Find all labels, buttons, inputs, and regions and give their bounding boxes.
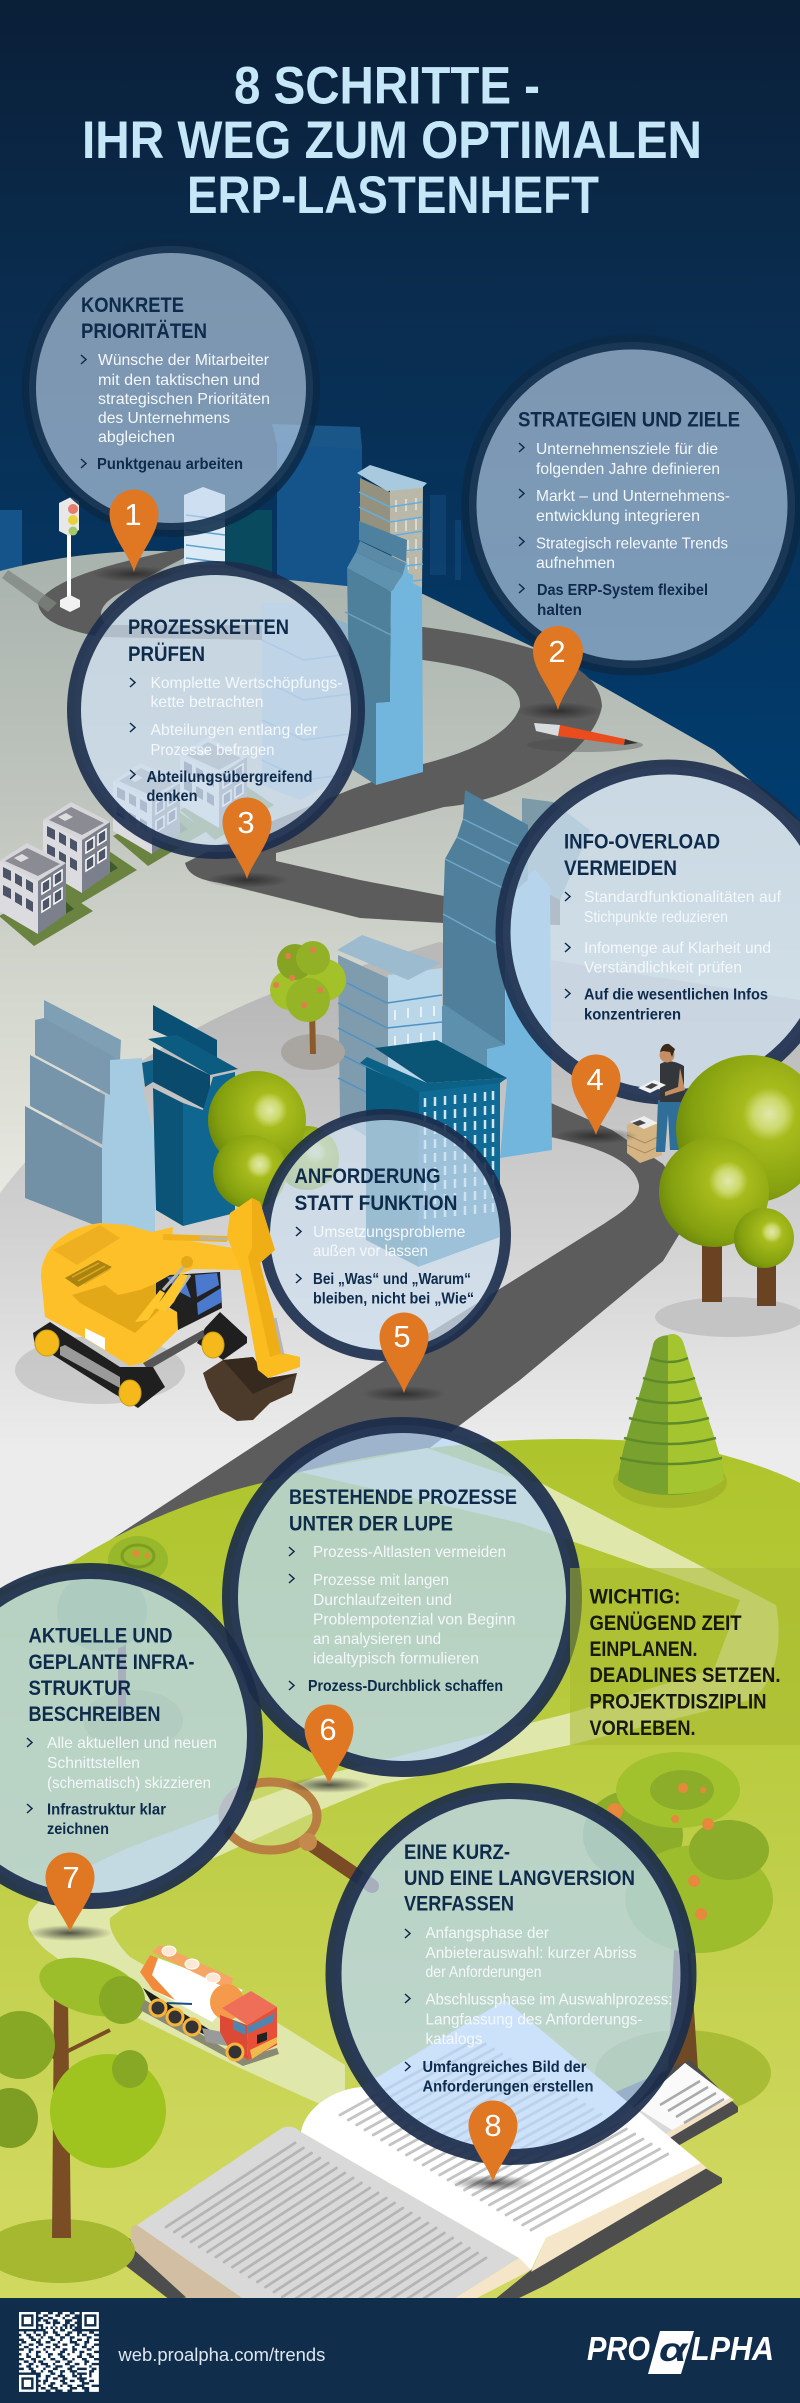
cover <box>108 2238 189 2300</box>
bullet list: Das ERP-System flexibel <box>537 582 708 599</box>
heading: EINE KURZ- <box>404 1840 510 1864</box>
panel: step 7 Infrastruktur beschreiben <box>0 1571 255 1901</box>
heading: UND EINE LANGVERSION <box>404 1866 635 1890</box>
icon: open book <box>108 2000 738 2342</box>
tree: spheres by excavator <box>208 1071 339 1209</box>
bullet list: folgenden Jahre definieren <box>536 461 720 478</box>
url: web.proalpha.com/trends <box>117 2345 325 2365</box>
bullet list <box>289 1544 516 1695</box>
building: central tower <box>345 465 427 785</box>
logo <box>587 2330 774 2374</box>
bullet list: Markt – und Unternehmens- <box>536 488 730 505</box>
bullet list: Infomenge auf Klarheit und <box>584 940 771 957</box>
bullet list: Anfangsphase der <box>426 1925 550 1942</box>
panel: step 6 Bestehende Prozesse <box>230 1425 574 1769</box>
callout: Wichtig: DEADLINES SETZEN. <box>590 1664 780 1687</box>
marker: pin 6 <box>287 1704 371 1793</box>
bullet list: des Unternehmens <box>98 410 230 427</box>
heading: AKTUELLE UND <box>28 1624 172 1648</box>
bullet list: kette betrachten <box>150 694 264 711</box>
bullet list <box>405 1925 672 2096</box>
bullet list: Wünsche der Mitarbeiter <box>98 352 270 369</box>
icon: excavator <box>15 1198 300 1421</box>
bullet list: Auf die wesentlichen Infos <box>584 986 768 1004</box>
heading: ANFORDERUNG <box>294 1164 440 1188</box>
cone tree <box>613 1334 727 1508</box>
bullet list: aufnehmen <box>536 555 615 572</box>
ground <box>0 551 800 2300</box>
right page <box>301 2000 701 2270</box>
bullet list <box>81 352 270 473</box>
small office buildings <box>0 737 274 946</box>
logo: PRO <box>587 2330 650 2367</box>
heading <box>28 1624 194 1726</box>
bullet list: entwicklung integrieren <box>536 508 700 525</box>
building: tower behind circle 3 <box>262 603 350 800</box>
bullet list: Langfassung des Anforderungs- <box>426 2011 642 2028</box>
bullet list <box>519 441 730 619</box>
icon: pen <box>527 723 643 752</box>
track left <box>33 1322 165 1408</box>
marker: pin 7 <box>28 1852 112 1941</box>
bullet list: Schnittstellen <box>47 1755 140 1772</box>
panel: step 1 konkrete Prioritäten <box>29 246 313 530</box>
marker: pin 5 <box>362 1312 446 1402</box>
bullet list: mit den taktischen und <box>98 372 260 389</box>
marker: pin 1: 1 <box>124 497 142 532</box>
marker: pin 3 <box>205 798 289 888</box>
title: IHR WEG ZUM OPTIMALEN <box>82 111 702 170</box>
bullet list: Strategisch relevante Trends <box>536 536 728 552</box>
bullet list <box>130 675 342 805</box>
body <box>41 1223 243 1366</box>
heading <box>564 830 720 880</box>
heading <box>404 1840 635 1916</box>
hydraulic arms <box>163 1263 190 1310</box>
bullet list: idealtypisch formulieren <box>313 1651 479 1668</box>
heading: VERFASSEN <box>404 1892 514 1916</box>
icon: tanker truck <box>140 1945 279 2066</box>
heading: PROZESSKETTEN <box>128 615 289 639</box>
heading: VERMEIDEN <box>564 856 677 880</box>
heading: PRÜFEN <box>128 641 205 666</box>
small tower <box>184 487 225 565</box>
marker: pin 8 <box>451 2100 535 2191</box>
heading: INFO-OVERLOAD <box>564 830 720 854</box>
bullet list: an analysieren und <box>313 1631 441 1648</box>
callout: Wichtig: GENÜGEND ZEIT <box>590 1612 742 1635</box>
callout: Wichtig: PROJEKTDISZIPLIN <box>590 1690 766 1713</box>
bullet list <box>296 1224 474 1308</box>
heading: STRUKTUR <box>28 1676 131 1700</box>
bullet list: Durchlaufzeiten und <box>313 1592 452 1609</box>
callout: Wichtig: WICHTIG: <box>590 1586 680 1608</box>
bullet list: Stichpunkte reduzieren <box>584 909 728 926</box>
heading: STRATEGIEN UND ZIELE <box>518 408 740 432</box>
marker: pin 6: 6 <box>319 1712 337 1747</box>
marker: pin 4 <box>554 1054 638 1144</box>
bullet list: Bei „Was“ und „Warum“ <box>313 1271 471 1288</box>
bullet list: Abschlussphase im Auswahlprozess: <box>426 1992 672 2009</box>
bullet list: Alle aktuellen und neuen <box>47 1735 217 1752</box>
bullet list: Umfangreiches Bild der <box>422 2059 586 2076</box>
title: ERP-LASTENHEFT <box>187 166 599 225</box>
bullet list: Anbieterauswahl: kurzer Abriss <box>426 1945 636 1962</box>
bullet list: der Anforderungen <box>426 1964 542 1981</box>
pale path on hill <box>28 1448 779 2120</box>
city block ground <box>0 942 800 2300</box>
cabin <box>156 1272 222 1330</box>
marker: pin 5: 5 <box>393 1319 411 1354</box>
big tree right <box>583 1752 773 2116</box>
bullet list <box>565 889 782 1024</box>
callout: Wichtig: EINPLANEN. <box>590 1638 698 1661</box>
bullet list: bleiben, nicht bei „Wie“ <box>313 1290 474 1308</box>
marker: pin 7: 7 <box>62 1860 80 1895</box>
road: lower stretch <box>72 1103 694 1565</box>
bullet list: (schematisch) skizzieren <box>47 1775 211 1792</box>
figure: man with papers <box>627 1044 685 1163</box>
tree behind circle 7 <box>57 1536 183 1750</box>
bullet list: strategischen Prioritäten <box>98 391 270 408</box>
green hill <box>0 1439 800 2300</box>
callout: Wichtig <box>570 1568 800 1745</box>
heading: BESCHREIBEN <box>28 1702 160 1726</box>
bullet list: Punktgenau arbeiten <box>97 456 243 473</box>
bullet list: zeichnen <box>47 1821 109 1838</box>
heading: KONKRETE <box>81 293 184 317</box>
panel: step 3 Prozessketten prüfen <box>74 568 358 852</box>
building: tall light tower <box>425 790 590 1158</box>
bucket <box>203 1357 297 1421</box>
stick <box>227 1198 300 1378</box>
heading: PRIORITÄTEN <box>81 319 207 343</box>
heading <box>289 1485 517 1536</box>
bullet list: Abteilungen entlang der <box>150 722 318 739</box>
panel: step 2 Strategien und Ziele <box>469 342 795 668</box>
heading <box>81 293 207 343</box>
bullet list: Abteilungsübergreifend <box>146 769 312 786</box>
heading <box>294 1164 458 1215</box>
background sky <box>0 0 800 830</box>
building: light block left <box>25 1000 155 1235</box>
heading: GEPLANTE INFRA- <box>28 1650 194 1674</box>
bullet list: Standardfunktionalitäten auf <box>584 889 782 906</box>
tree: orange fruit <box>270 941 346 1070</box>
bullet list: Prozess-Altlasten vermeiden <box>313 1544 506 1561</box>
bullet list: katalogs <box>426 2031 482 2048</box>
bullet list <box>27 1735 217 1838</box>
page lines <box>166 2143 486 2342</box>
heading <box>128 615 289 666</box>
blue lower tiers <box>359 521 407 562</box>
road: first stretch <box>38 548 602 925</box>
bullet list: außen vor lassen <box>313 1243 428 1260</box>
bullet list: Verständlichkeit prüfen <box>584 960 742 976</box>
bullet list: Unternehmensziele für die <box>536 441 718 458</box>
title <box>82 56 702 225</box>
logo: LPHA <box>691 2330 774 2367</box>
city silhouette <box>0 424 461 608</box>
logo: α <box>659 2331 689 2368</box>
bullet list: konzentrieren <box>584 1006 681 1024</box>
panel: step 8 Kurz- und Langversion <box>334 1791 688 2157</box>
marker: pin 4: 4 <box>586 1062 604 1097</box>
icon: magnifier <box>223 1782 372 1886</box>
building: grey-blue block <box>337 935 442 1150</box>
marker: pin 1 <box>92 490 176 582</box>
bullet list: denken <box>146 788 198 805</box>
heading: UNTER DER LUPE <box>289 1512 453 1536</box>
bullet list: Umsetzungsprobleme <box>313 1224 466 1241</box>
panel: step 5 Anforderung statt Funktion <box>264 1114 506 1356</box>
footer <box>0 2298 800 2403</box>
callout: Wichtig: VORLEBEN. <box>590 1717 696 1740</box>
bullet list: Prozess-Durchblick schaffen <box>308 1678 503 1695</box>
panel: step 4 Info-Overload vermeiden <box>503 767 800 1097</box>
marker: pin 2 <box>517 626 601 720</box>
heading: STATT FUNKTION <box>294 1191 458 1215</box>
icon: QR code <box>19 2313 99 2391</box>
building: dark blue block <box>360 1040 507 1267</box>
track right <box>197 1312 247 1360</box>
marker: pin 2: 2 <box>548 634 566 669</box>
bullet list: abgleichen <box>98 429 175 446</box>
small book <box>533 2060 738 2182</box>
marker: pin 8: 8 <box>484 2108 502 2143</box>
bullet list: Komplette Wertschöpfungs- <box>150 675 342 692</box>
marker: pin 3: 3 <box>237 805 255 840</box>
tree: large spheres right <box>655 1055 800 1337</box>
gray upper <box>360 478 390 540</box>
heading: BESTEHENDE PROZESSE <box>289 1485 517 1509</box>
icon: traffic light <box>2 497 80 612</box>
bullet list: Anforderungen erstellen <box>422 2079 594 2096</box>
tree lower left <box>0 1947 166 2283</box>
bullet list: Prozesse mit langen <box>313 1572 449 1589</box>
bullet list: Prozesse befragen <box>150 742 274 759</box>
left page <box>131 2225 245 2300</box>
bullet list: Problempotenzial von Beginn <box>313 1612 516 1629</box>
title: 8 SCHRITTE - <box>234 56 540 116</box>
bullet list: halten <box>537 602 582 619</box>
bullet list: Infrastruktur klar <box>47 1802 166 1819</box>
building: dark block left <box>142 1005 238 1226</box>
